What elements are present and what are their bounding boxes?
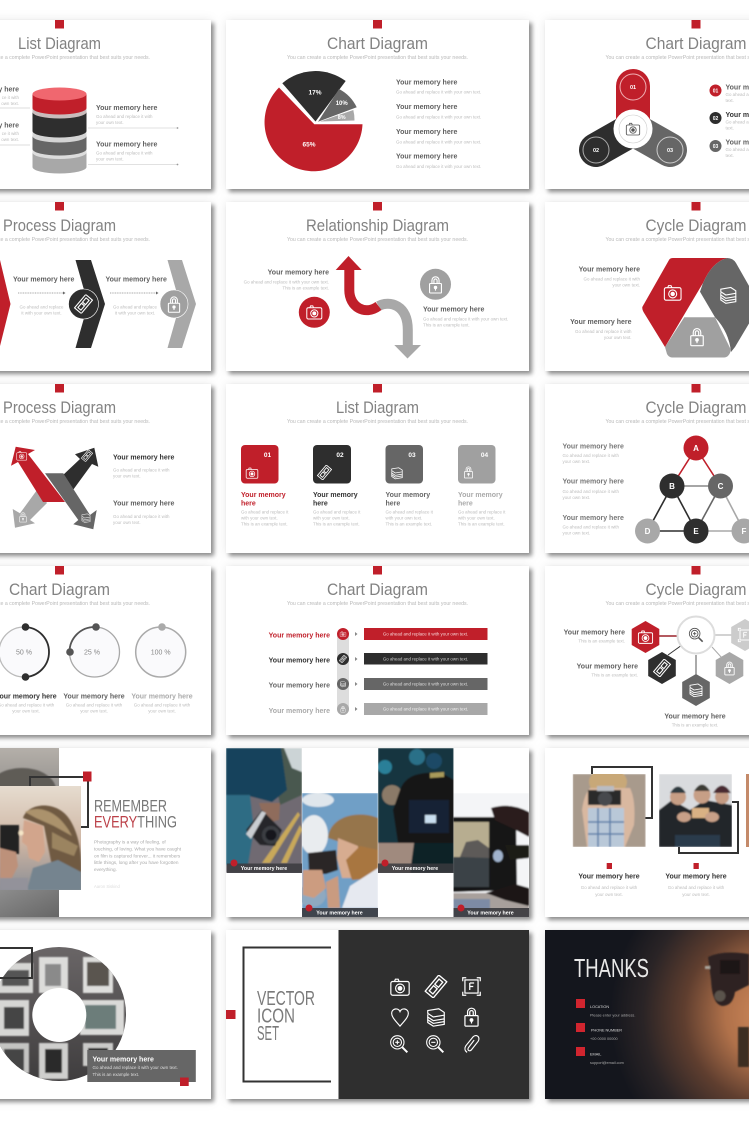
bar row 3: Go ahead and replace it with your own text. <box>383 682 468 686</box>
gray lock badge <box>420 269 451 300</box>
pie chart: 65% <box>302 142 316 148</box>
node network: A <box>693 444 699 453</box>
subtitle: You can create a complete PowerPoint presentation that best suits your needs. <box>287 601 468 607</box>
step text 1: it with your own text. <box>21 310 62 316</box>
tri-lobe diagram: 03 <box>667 148 673 154</box>
slide: gallery ring <box>0 930 211 1099</box>
corner frame line <box>30 777 88 827</box>
red square <box>83 772 92 782</box>
card 03: This is an example text. <box>386 522 432 526</box>
gauge 25% <box>63 623 125 714</box>
contact: phone: +00 0000 00000 <box>590 1037 618 1041</box>
heading: ICON <box>257 1006 295 1028</box>
text items: This is an example text. <box>672 722 718 728</box>
photo: camera at hip <box>226 748 302 873</box>
right text: Your memory here <box>423 306 484 314</box>
step text 2: it with your own text. <box>115 310 155 316</box>
card 04: Your memory <box>458 492 503 499</box>
gray arrow <box>378 304 421 358</box>
text items: Your memory here <box>577 664 638 670</box>
gauge 50% <box>0 623 57 714</box>
bar row 4: Your memory here <box>269 708 330 715</box>
legend list: 02 <box>713 116 718 122</box>
text: right items: your own text. <box>96 120 124 125</box>
legend list: 03 <box>713 144 718 150</box>
gauge 100%: Go ahead and replace it with <box>134 702 191 708</box>
photo: three friends <box>659 774 732 847</box>
text items: your own text. <box>113 474 141 478</box>
text: right items: Your memory here <box>96 142 157 148</box>
red hexagon <box>632 621 659 653</box>
caption 2: your own text. <box>682 892 710 897</box>
card 03: 03 <box>408 452 416 459</box>
card 03: here <box>386 500 400 508</box>
heading: THANKS <box>574 953 649 983</box>
slide: circle progress charts <box>0 566 211 735</box>
text: right items: Your memory here <box>96 105 157 112</box>
slide: pie chart <box>226 20 529 189</box>
contact: email: support@email.com <box>590 1061 624 1065</box>
text top: Your memory here <box>579 266 640 274</box>
tri-lobe diagram: 01 <box>630 85 636 91</box>
text list: Go ahead and replace it with <box>562 524 620 530</box>
photo: camera back <box>378 748 454 873</box>
photo background <box>545 930 749 1099</box>
cylinder chart <box>32 88 86 173</box>
light chevron with lock icon <box>160 260 196 348</box>
caption 2 <box>665 863 727 897</box>
title: List Diagram <box>336 398 419 417</box>
hexagon ribbon <box>642 258 749 358</box>
heading: EVERYTHING <box>94 812 177 832</box>
step text 2 <box>106 276 167 316</box>
left text <box>244 270 329 290</box>
text list: Go ahead and replace it with your own text. <box>396 140 481 144</box>
slide: node network <box>545 384 749 553</box>
text bottom: your own text. <box>604 335 632 340</box>
slide: relationship arrows <box>226 202 529 371</box>
text bottom: Go ahead and replace it with <box>575 329 632 334</box>
slide: process chevrons <box>0 202 211 371</box>
red square <box>226 1010 236 1019</box>
signature: Aaron Siskind <box>94 884 121 889</box>
text list: Go ahead and replace it with your own text. <box>396 114 481 120</box>
title: Chart Diagram <box>327 34 428 53</box>
subtitle: You can create a complete PowerPoint presentation that best suits your needs. <box>287 237 468 243</box>
contact: email <box>576 1047 624 1065</box>
caption box: This is an example text. <box>92 1072 139 1077</box>
text items: Your memory here <box>664 714 726 720</box>
card 04: This is an example text. <box>458 522 505 526</box>
text: right items: Go ahead and replace it with <box>96 114 153 119</box>
text: left items: own text. <box>1 101 19 106</box>
card 01: This is an example text. <box>241 522 288 526</box>
title: Chart Diagram <box>327 580 428 599</box>
card 03: with your own text. <box>386 516 422 520</box>
red tab <box>55 20 64 28</box>
slide: hexagon cycle <box>545 202 749 371</box>
tri-lobe diagram: 02 <box>593 148 599 154</box>
slide: list diagram cylinder <box>0 20 211 189</box>
text items: Your memory here <box>564 630 625 636</box>
frame line 1 <box>592 767 652 818</box>
crossing arrows <box>11 447 98 529</box>
text list: Go ahead and replace it with your own text. <box>396 164 481 169</box>
subtitle: You can create a complete PowerPoint presentation that best suits your needs. <box>287 55 468 61</box>
red tab <box>373 384 382 392</box>
heading: VECTOR <box>257 988 315 1010</box>
captions: Your memory here <box>467 910 514 916</box>
text: left items: own text. <box>1 137 19 142</box>
card 01: with your own text. <box>241 516 278 520</box>
photo: man with camera <box>298 793 378 917</box>
card 03: Go ahead and replace it <box>386 510 434 514</box>
title: Chart Diagram <box>9 580 110 599</box>
bar row 2 <box>269 653 488 665</box>
red tab <box>692 20 700 28</box>
gauge 100% <box>131 623 193 714</box>
center hole <box>32 988 86 1042</box>
red tab <box>55 384 64 392</box>
caption 2: Your memory here <box>665 874 727 880</box>
card 03: Your memory <box>386 492 430 499</box>
dark chevron with film icon <box>68 260 105 348</box>
paragraph: little things, long after you have forgotten <box>94 860 179 865</box>
bar row 1 <box>269 628 488 640</box>
heading: SET <box>257 1023 279 1045</box>
slide: tri-lobe chart <box>545 20 749 189</box>
caption box: Go ahead and replace it with your own text. <box>92 1065 178 1070</box>
red tab <box>692 566 700 574</box>
step text 1 <box>13 276 74 316</box>
red square <box>180 1078 189 1086</box>
text items: Go ahead and replace it with <box>113 468 170 472</box>
subtitle: You can create a complete PowerPoint presentation that best suits your needs. <box>287 419 468 425</box>
heading <box>257 988 315 1045</box>
gauge 100%: 100 % <box>151 650 171 656</box>
text items: This is an example text. <box>591 672 638 678</box>
gauge 25%: 25 % <box>84 650 100 656</box>
step text 2: Go ahead and replace <box>113 304 157 310</box>
caption 1: your own text. <box>595 892 623 897</box>
text items: This is an example text. <box>578 638 625 644</box>
red tab <box>373 20 382 28</box>
dark panel <box>338 930 529 1099</box>
text list: your own text. <box>562 530 590 536</box>
card 01: Go ahead and replace it <box>241 510 289 514</box>
text list: Your memory here <box>396 104 457 111</box>
connectors <box>659 635 732 675</box>
photo sliver <box>746 774 749 847</box>
paragraph: touching, of loving. What you have caught <box>94 846 182 852</box>
text top: your own text. <box>612 282 640 288</box>
text list: Your memory here <box>562 444 624 450</box>
text list: your own text. <box>562 495 590 500</box>
red tab <box>55 202 64 210</box>
slide: framed photos <box>545 748 749 917</box>
bar row 4: Go ahead and replace it with your own text. <box>383 706 468 712</box>
title: List Diagram <box>18 34 101 53</box>
title: Relationship Diagram <box>306 216 449 235</box>
text list: Your memory here <box>562 515 624 522</box>
card 01: 01 <box>264 452 271 459</box>
node network: F <box>742 527 747 536</box>
red tab <box>692 384 700 392</box>
gauge 25%: Go ahead and replace it with <box>66 702 123 708</box>
text: left items <box>0 86 30 145</box>
bar row 1: Your memory here <box>269 632 330 640</box>
card 04: 04 <box>481 452 488 459</box>
captions: Your memory here <box>392 866 438 872</box>
node network: B <box>669 482 675 491</box>
caption 1: Your memory here <box>578 874 640 880</box>
slide: list cards <box>226 384 529 553</box>
heading <box>94 796 177 832</box>
card 02: 02 <box>336 452 344 459</box>
heading: REMEMBER <box>94 796 167 816</box>
right text <box>423 306 508 328</box>
title: Process Diagram <box>3 398 116 417</box>
frame outline <box>0 948 32 978</box>
contact: location: LOCATION <box>590 1005 609 1009</box>
text items: Go ahead and replace it with <box>113 514 170 519</box>
light hexagon <box>716 652 743 684</box>
vertical track <box>337 630 349 715</box>
text items <box>113 454 174 525</box>
text: right items: your own text. <box>96 156 124 162</box>
bar row 3: Your memory here <box>269 682 330 690</box>
step text 1: Your memory here <box>13 276 74 284</box>
paragraph: Photography is a way of feeling, of <box>94 840 166 844</box>
card 02: Your memory <box>313 492 358 499</box>
text top: Go ahead and replace it with <box>584 276 641 282</box>
card 02 <box>313 445 361 526</box>
red camera badge <box>299 297 330 328</box>
text list: Your memory here <box>396 129 457 136</box>
card 01 <box>241 445 289 526</box>
gauge 25%: Your memory here <box>63 694 125 700</box>
right text: This is an example text. <box>423 322 470 328</box>
red tab <box>373 566 382 574</box>
text list: Your memory here <box>396 154 457 160</box>
bar row 3 <box>269 678 488 690</box>
text list: Go ahead and replace it with your own text. <box>396 90 481 94</box>
text bottom: Your memory here <box>570 319 632 326</box>
card 01: here <box>241 500 256 508</box>
contact: email: EMAIL <box>590 1053 601 1057</box>
left text: This is an example text. <box>282 286 329 290</box>
red chevron <box>0 260 10 346</box>
text items: your own text. <box>113 520 141 525</box>
caption 2: Go ahead and replace it with <box>668 885 725 890</box>
node network: C <box>718 482 724 491</box>
step text 1: Go ahead and replace <box>20 304 64 310</box>
caption box: Your memory here <box>92 1056 154 1064</box>
pale hexagon <box>731 619 749 651</box>
bracket frame <box>244 948 331 1082</box>
card 02: with your own text. <box>313 516 350 520</box>
left text: Go ahead and replace it with your own text. <box>244 280 329 284</box>
bar row 1: Go ahead and replace it with your own text. <box>383 632 468 636</box>
photo: child with camera <box>573 768 646 847</box>
caption 1: Go ahead and replace it with <box>581 885 638 890</box>
captions <box>227 860 529 917</box>
card 02: Go ahead and replace it <box>313 510 361 514</box>
card 04 <box>458 445 506 526</box>
pie chart <box>265 71 362 171</box>
text list <box>396 80 481 169</box>
red tab <box>55 566 64 574</box>
caption 1 <box>578 863 640 897</box>
legend list: text. <box>726 98 734 103</box>
legend list: 01 <box>713 88 718 94</box>
photo: camera <box>705 953 749 1067</box>
text bottom <box>570 319 632 340</box>
gauge 50%: 50 % <box>16 650 32 656</box>
gallery disk <box>0 945 130 1085</box>
bar row 2: Your memory here <box>269 658 330 664</box>
card 03 <box>386 445 434 526</box>
text: right items: Go ahead and replace it with <box>96 150 153 156</box>
photo: phone <box>453 793 529 917</box>
captions: Your memory here <box>316 910 363 916</box>
text top <box>579 266 641 288</box>
text items: Your memory here <box>113 500 174 508</box>
caption box <box>87 1050 196 1082</box>
gauge 100%: your own text. <box>148 708 176 714</box>
photo: woman with camera <box>0 786 81 890</box>
card 04: here <box>458 500 473 508</box>
slide: crossing arrows <box>0 384 211 553</box>
contact: phone <box>576 1023 622 1041</box>
tri-lobe diagram <box>583 74 683 163</box>
slide: remember everything <box>0 748 211 917</box>
dark hexagon <box>648 652 676 684</box>
text list: Go ahead and replace it with <box>562 489 620 494</box>
slide: hexagon hub <box>545 566 749 735</box>
left text: Your memory here <box>268 270 329 276</box>
legend list: text. <box>726 126 734 130</box>
icon grid <box>391 975 480 1052</box>
photo: hair strip top <box>0 748 59 786</box>
gauge 25%: your own text. <box>80 708 108 714</box>
hub circle with zoom icon <box>678 616 714 654</box>
paragraph: everything. <box>94 867 117 872</box>
pie chart: 10% <box>336 101 348 107</box>
red arrow <box>336 256 378 310</box>
text list: Your memory here <box>562 478 624 486</box>
node network: E <box>693 527 699 536</box>
step text 2: Your memory here <box>106 276 167 284</box>
legend list <box>710 84 749 158</box>
card 04: with your own text. <box>458 516 495 520</box>
right text: Go ahead and replace it with your own text. <box>423 316 508 322</box>
red tab <box>373 202 382 210</box>
card 04: Go ahead and replace it <box>458 510 506 514</box>
text: left items: ce it with <box>2 95 20 100</box>
slide: four photo columns <box>226 748 529 917</box>
contact: phone: PHONE NUMBER <box>591 1029 622 1033</box>
text items: Your memory here <box>113 454 174 462</box>
text list: Go ahead and replace it with <box>562 453 620 458</box>
card 01: Your memory <box>241 492 286 499</box>
pie chart: 8% <box>338 115 346 121</box>
bar row 4 <box>269 703 488 715</box>
node network <box>635 436 749 544</box>
contact: location: Please enter your address. <box>590 1014 635 1018</box>
text list: Your memory here <box>396 80 457 86</box>
gray hexagon <box>682 674 710 706</box>
slide: vector icon set <box>226 930 529 1099</box>
pie chart: 17% <box>308 90 322 96</box>
slide: thanks <box>545 930 749 1099</box>
text list <box>562 444 624 536</box>
gauge 50%: your own text. <box>12 708 40 714</box>
captions: Your memory here <box>241 866 287 872</box>
title: Process Diagram <box>3 216 116 235</box>
bar row 2: Go ahead and replace it with your own text. <box>383 656 468 662</box>
paragraph: on film is captured forever... it remembers <box>94 854 181 858</box>
gauge 100%: Your memory here <box>131 694 193 700</box>
legend list: text. <box>726 153 734 158</box>
text: left items: ce it with <box>2 131 20 136</box>
card 02: here <box>313 500 328 508</box>
card 02: This is an example text. <box>313 522 360 526</box>
photo: bottom strip <box>0 890 59 917</box>
paragraph <box>94 840 182 872</box>
contact: location <box>576 999 635 1018</box>
text: right items <box>88 105 178 165</box>
frame line 2 <box>679 802 738 853</box>
node network: D <box>645 527 651 536</box>
slide: bar list <box>226 566 529 735</box>
text list: your own text. <box>562 459 590 464</box>
text items <box>564 630 726 728</box>
red tab <box>692 202 700 210</box>
